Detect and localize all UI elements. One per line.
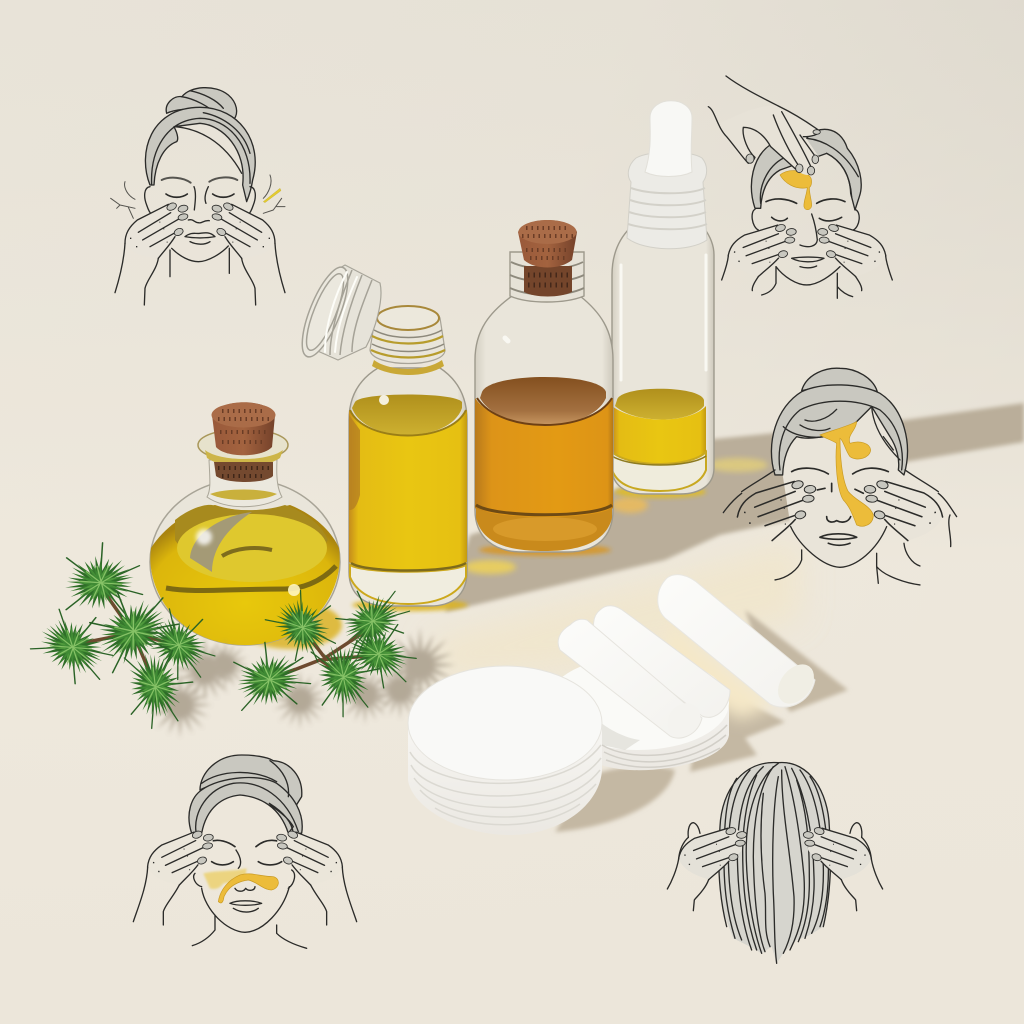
hand left <box>667 818 749 911</box>
hand left <box>133 825 215 925</box>
hand left <box>115 202 189 305</box>
sprig right <box>222 573 425 724</box>
hand left <box>722 215 798 291</box>
cotton stack back <box>547 656 729 770</box>
plant sprigs with shadow <box>25 537 456 738</box>
cast shadows of bottles <box>352 403 1024 680</box>
cotton stack front <box>408 666 602 835</box>
icon: cork <box>518 220 577 268</box>
illustration: woman with oil across nose <box>133 755 357 948</box>
hand right <box>801 818 883 911</box>
icon: cork <box>212 402 276 455</box>
illustration: woman with oil running down face <box>723 368 957 585</box>
hand right <box>211 202 285 305</box>
illustration: woman with oil on forehead and helper hand <box>708 76 892 298</box>
helper hand <box>708 76 820 175</box>
sprig left <box>25 537 228 735</box>
illustration: woman massaging face with sprigs <box>111 88 285 305</box>
cotton roll left <box>558 619 707 743</box>
hand right <box>275 825 357 925</box>
hand right <box>862 470 957 547</box>
illustration: long hair from behind with hands <box>667 763 883 963</box>
icon: dropper collar <box>627 101 707 249</box>
icon: twigs <box>111 175 285 218</box>
cotton pads and rolls <box>408 575 848 835</box>
hand left <box>723 470 818 547</box>
bottle: amber oil <box>475 220 613 552</box>
bottle: bright yellow oil with open neck <box>349 306 467 606</box>
hand right <box>816 215 892 291</box>
cotton roll middle <box>594 606 730 717</box>
bottle: dropper with pale yellow oil <box>612 101 714 494</box>
oil under eyes <box>203 868 278 903</box>
icon: open glass cap <box>293 262 381 362</box>
oil on forehead <box>780 171 812 210</box>
bottle: round flask <box>150 402 342 649</box>
cotton roll right <box>658 575 821 711</box>
